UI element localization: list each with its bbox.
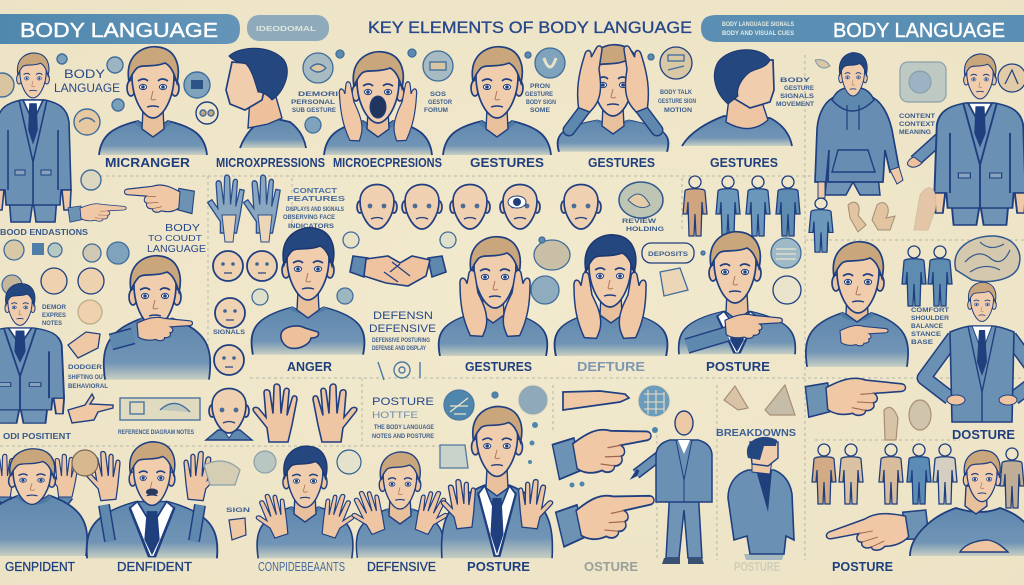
header banner: right (701, 15, 1024, 42)
label: microxpressions: MICROXPRESSIONS (216, 156, 325, 170)
caption block: current features: FEATURES (287, 196, 345, 203)
oval icon with caption: HOLDING (626, 227, 664, 233)
icons and text beside scream bust: PERSONAL (291, 100, 335, 106)
small portraits and icons lower left (2, 240, 129, 324)
label: posture faded: POSTURE (734, 560, 780, 574)
bust: anger (252, 228, 364, 355)
label: gestures: GESTURES (470, 156, 544, 170)
bust: hands on head (558, 43, 668, 152)
icon under defensive (378, 362, 420, 380)
caption near suit man: DODGER (68, 365, 103, 371)
defensive text block: DEFENSN (373, 310, 433, 322)
bust: worried gesture (443, 47, 551, 155)
palms, pair upper (208, 175, 280, 242)
label: dosture: DOSTURE (952, 428, 1015, 442)
bust: right, pointing (806, 242, 908, 367)
label: gestures 2: GESTURES (588, 156, 655, 170)
caption right of bust: SHOULDER (911, 316, 950, 322)
bust: micranger (99, 47, 207, 155)
icons near anger (252, 232, 456, 305)
icon and caption near gestures bust: SOS (430, 92, 446, 98)
bottom hand (824, 502, 933, 563)
bust: posture suit with pointing hand (679, 232, 795, 354)
posture text block: NOTES AND POSTURE (372, 434, 434, 440)
small dots decoration cluster (528, 422, 658, 488)
icons around first bust (0, 54, 218, 190)
small figures and posture sketches, right (809, 188, 936, 252)
caption beside profile: MOVEMENT (776, 102, 814, 108)
heading: body emotions: BOOD ENDASTIONS (0, 228, 89, 237)
bust: profile left (226, 48, 306, 148)
icon and caption (648, 47, 696, 114)
framed sketch icons: REFERENCE DIAGRAM NOTES (118, 430, 194, 436)
bust: woman hands up (345, 452, 455, 558)
pointing hand, lower (68, 204, 126, 222)
icons and text beside scream bust (291, 50, 344, 133)
defensive text block (369, 310, 436, 352)
caption right of bust: COMFORT (911, 308, 949, 314)
label: posture bottom: POSTURE (832, 560, 893, 574)
label: gestures middle: GESTURES (465, 360, 532, 374)
brain (955, 236, 1020, 282)
posture text block (372, 396, 434, 440)
bust: gestures hands on cheeks (439, 237, 547, 356)
caption right of bust: STANCE (911, 332, 941, 338)
icons above posture heading (440, 390, 498, 468)
man from behind in suit, looking right (728, 437, 794, 560)
caption right of bust: BALANCE (911, 324, 943, 330)
suit man, left second row (0, 283, 64, 423)
icon and caption: SOME (530, 108, 550, 114)
big pointing hand (805, 378, 906, 417)
caption beside profile: BODY (780, 78, 810, 84)
small hand and pointing gesture (68, 332, 113, 423)
caption near suit man: EXPRES (42, 313, 66, 319)
icons between busts (531, 237, 801, 304)
caption block: current features: INDICATORS (288, 224, 334, 230)
text: body language small heading: LANGUAGE (54, 81, 120, 95)
bust: pointing man (104, 256, 210, 380)
bust: posture suit hands up (439, 407, 555, 558)
bust: deftur hands on cheeks (555, 235, 667, 356)
icons and text beside scream bust: DEMORI (298, 92, 339, 98)
caption beside hoodie: MEANING (899, 130, 931, 136)
label: posture mid: POSTURE (706, 360, 770, 374)
label: body confident small: ODI POSITIENT (3, 432, 71, 441)
icon and caption near gestures bust: GESTOR (428, 100, 453, 106)
header banner: right: BODY AND VISUAL CUES (722, 31, 794, 37)
label: posture lower: POSTURE (467, 560, 530, 574)
pill label: IDEODOMAL (256, 26, 317, 33)
small figures near brain (902, 246, 952, 306)
label: micranger: MICRANGER (105, 156, 190, 170)
pointing hand: wide flat (563, 391, 629, 410)
caption block: current features: DISPLAYS AND SIGNALS (286, 207, 344, 213)
caption block: current features: OBSERVING FACE (283, 215, 335, 221)
bust: confident (0, 449, 87, 556)
text: body language small heading: BODY (64, 67, 105, 81)
caption beside hoodie: CONTEXT (899, 122, 935, 128)
heading: body to court language (147, 223, 206, 255)
caption beside profile (776, 78, 814, 108)
bald face row (357, 184, 601, 229)
label: genpident: GENPIDENT (5, 560, 75, 574)
icons beside hoodie (815, 60, 1024, 102)
header banner: left (0, 14, 240, 44)
defensive text block: DEFENSIVE (369, 323, 436, 335)
small posture sketches under big hand (884, 400, 931, 440)
icon and caption: BODY TALK (660, 90, 693, 96)
caption right of bust: BASE (911, 340, 933, 346)
bust: denfident suit (84, 442, 220, 558)
posture text block: POSTURE (372, 396, 434, 408)
icon and caption near gestures bust (408, 49, 453, 114)
header banner: right: BODY LANGUAGE (833, 20, 1005, 42)
caption beside profile: SIGNALS (780, 94, 814, 100)
posture text block: HOTTFE (372, 410, 418, 420)
heading: body to court language: BODY (165, 223, 200, 234)
bust: bottom right arms folded (910, 450, 1024, 556)
caption block: current features: CONTACT (293, 188, 338, 195)
caption near suit man: SHIFTING OUT (68, 375, 106, 381)
man in hoodie (815, 53, 903, 198)
small figures row (683, 176, 800, 236)
label: gesture faded: OSTURE (584, 560, 638, 574)
icons and text beside scream bust: SUB GESTURE (292, 108, 336, 114)
small face column (213, 251, 277, 375)
label: confidebeaants: CONPIDEBEAANTS (258, 560, 345, 574)
suit man, hands on hips (924, 282, 1024, 422)
heading: body to court language: TO COUDT (148, 234, 202, 243)
caption beside profile: GESTURE (784, 86, 814, 92)
pointing hand large b (554, 489, 659, 547)
label: breakdowns: BREAKDOWNS (716, 428, 796, 439)
man in suit gesturing, right (907, 54, 1024, 225)
bald bust (206, 388, 252, 440)
handshake (350, 256, 446, 286)
icons beside denfident (72, 450, 361, 540)
framed sketch icons (118, 398, 200, 436)
bust: profile right (682, 50, 792, 146)
icon and caption: GESTURE SIGN (658, 99, 696, 105)
header banner: right: BODY LANGUAGE SIGNALS (722, 22, 794, 28)
icons between busts: DEPOSITS (648, 252, 688, 258)
icon and caption near gestures bust: FORUM (424, 108, 448, 114)
caption near suit man: BEHAVIORAL (68, 384, 108, 390)
label: defture: DEFTURE (577, 360, 645, 374)
caption near suit man: DEMOR (42, 305, 67, 311)
open palms (253, 384, 357, 442)
icon: grid and blue circle (518, 385, 670, 417)
oval icon with caption: REVIEW (622, 219, 656, 225)
pill label (247, 15, 329, 41)
posture text block: THE BODY LANGUAGE (374, 425, 434, 431)
caption beside hoodie (899, 114, 935, 136)
defensive text block: DEFENSE AND DISPLAY (372, 346, 426, 352)
icon and caption (525, 48, 565, 114)
icon and caption: GESTURE (525, 92, 553, 98)
bust: dark hair hands up (250, 446, 360, 558)
bust: scream, hands on cheeks (324, 52, 432, 155)
standing man in suit, left (0, 53, 71, 222)
standing man with outstretched arm (634, 411, 712, 564)
pointing hand large a (551, 425, 655, 480)
caption beside hoodie: CONTENT (899, 114, 935, 120)
defensive text block: DEFENSIVE POSTURING (372, 338, 430, 344)
small face column: SIGNALS (213, 330, 245, 336)
icon and caption: BODY SIGN (526, 100, 556, 106)
caption near suit man: NOTES (42, 321, 62, 327)
label: anger: ANGER (287, 360, 332, 374)
caption near suit man (42, 305, 108, 390)
text: body language small heading (54, 67, 120, 95)
pointing hand, top (124, 185, 194, 214)
row of figure sketches (812, 444, 1024, 508)
caption block: current features (283, 188, 345, 230)
oval icon with caption (619, 182, 664, 233)
label: denfident: DENFIDENT (117, 560, 192, 574)
header banner: left: BODY LANGUAGE (20, 20, 218, 42)
sketches at top of breakdowns (724, 385, 795, 415)
caption right of bust (911, 308, 950, 346)
label: microecpresions: MICROECPRESIONS (333, 156, 442, 170)
icon and caption: PRON (530, 84, 550, 90)
title: KEY ELEMENTS OF BODY LANGUAGE (368, 18, 692, 37)
label: gestures 3: GESTURES (710, 156, 778, 170)
label: defensive bottom: DEFENSIVE (367, 560, 436, 574)
icon and caption: MOTION (664, 108, 692, 114)
icons beside denfident: SIGN (226, 508, 250, 514)
heading: body to court language: LANGUAGE (147, 244, 206, 255)
